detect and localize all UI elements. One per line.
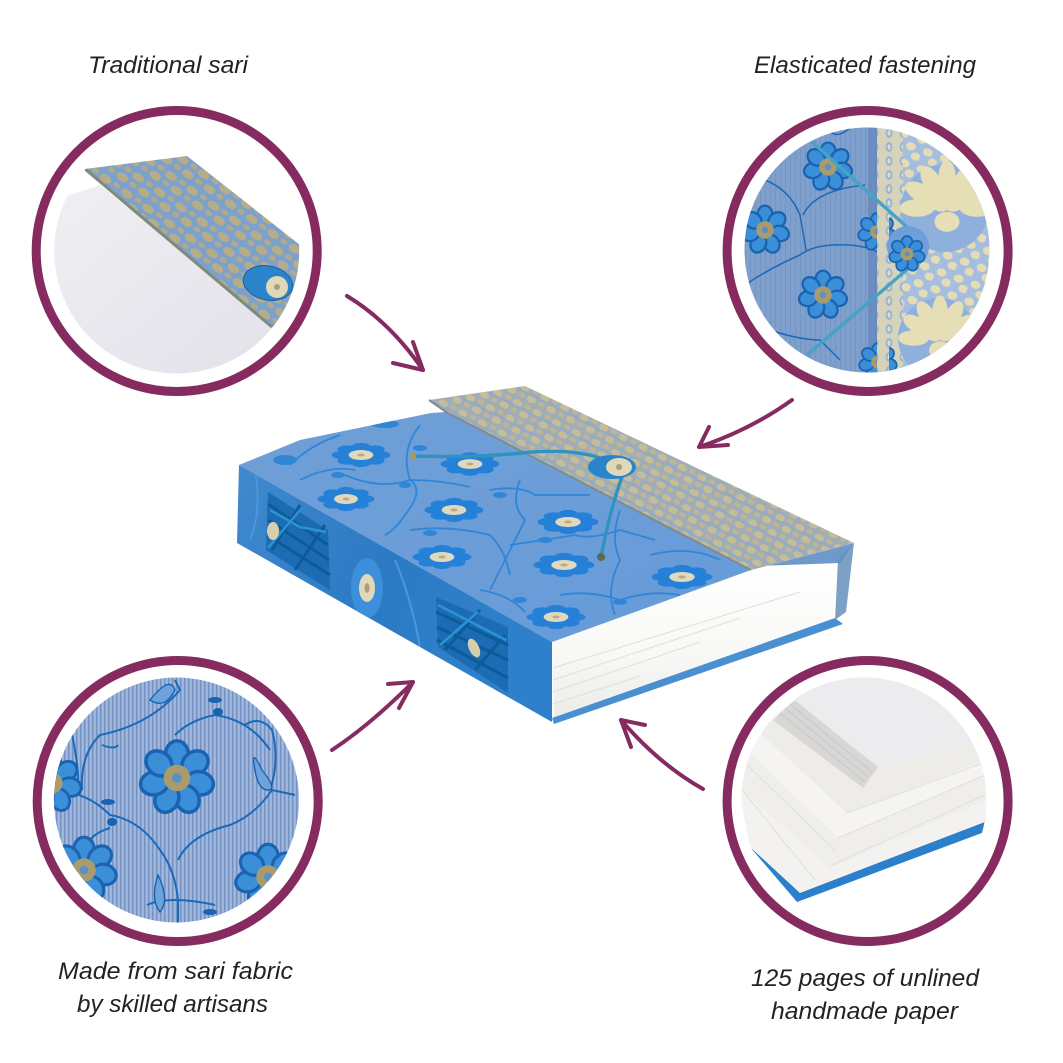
icon: button on flap <box>240 261 296 305</box>
heading: traditional sari: Traditional sari <box>88 52 249 79</box>
icon: elastic cord and button <box>807 142 929 355</box>
photo: flap over white paper <box>54 156 300 374</box>
arrow: bottom left to book <box>332 682 413 750</box>
caption: sari fabric <box>58 958 293 1018</box>
caption: sari fabric: Made from sari fabric <box>58 958 293 985</box>
arrow: bottom right to book <box>621 720 703 789</box>
ring <box>37 660 318 942</box>
panel: sari fabric detail circle <box>21 660 318 942</box>
caption: paper <box>751 965 980 1025</box>
photo: fabric and brocade <box>744 128 990 372</box>
ring <box>36 110 317 392</box>
bottom cover strip <box>552 618 843 724</box>
panel: elasticated fastening detail circle <box>727 110 1008 392</box>
book front cover <box>232 412 751 655</box>
elastic cord and button <box>410 451 636 561</box>
book flap <box>429 386 854 620</box>
ring <box>727 110 1008 392</box>
book spine <box>237 465 552 722</box>
panel: traditional sari detail circle <box>36 110 317 400</box>
arrow: top right to book <box>699 400 792 447</box>
page block <box>552 563 838 717</box>
ring <box>727 660 1008 942</box>
fabric pattern <box>232 420 720 655</box>
caption: paper: 125 pages of unlined <box>751 965 980 992</box>
photo: stacked paper sheets <box>742 678 986 902</box>
photo: woven fabric with flowers <box>54 678 299 922</box>
book illustration <box>232 386 854 724</box>
caption: paper: handmade paper <box>771 998 959 1025</box>
heading: elasticated fastening: Elasticated fastening <box>754 52 977 79</box>
stitching panel upper <box>266 492 330 590</box>
caption: sari fabric: by skilled artisans <box>77 991 268 1018</box>
panel: handmade paper detail circle <box>727 660 1008 942</box>
stitching panel lower <box>436 597 508 693</box>
arrow: top left to book <box>347 296 423 370</box>
